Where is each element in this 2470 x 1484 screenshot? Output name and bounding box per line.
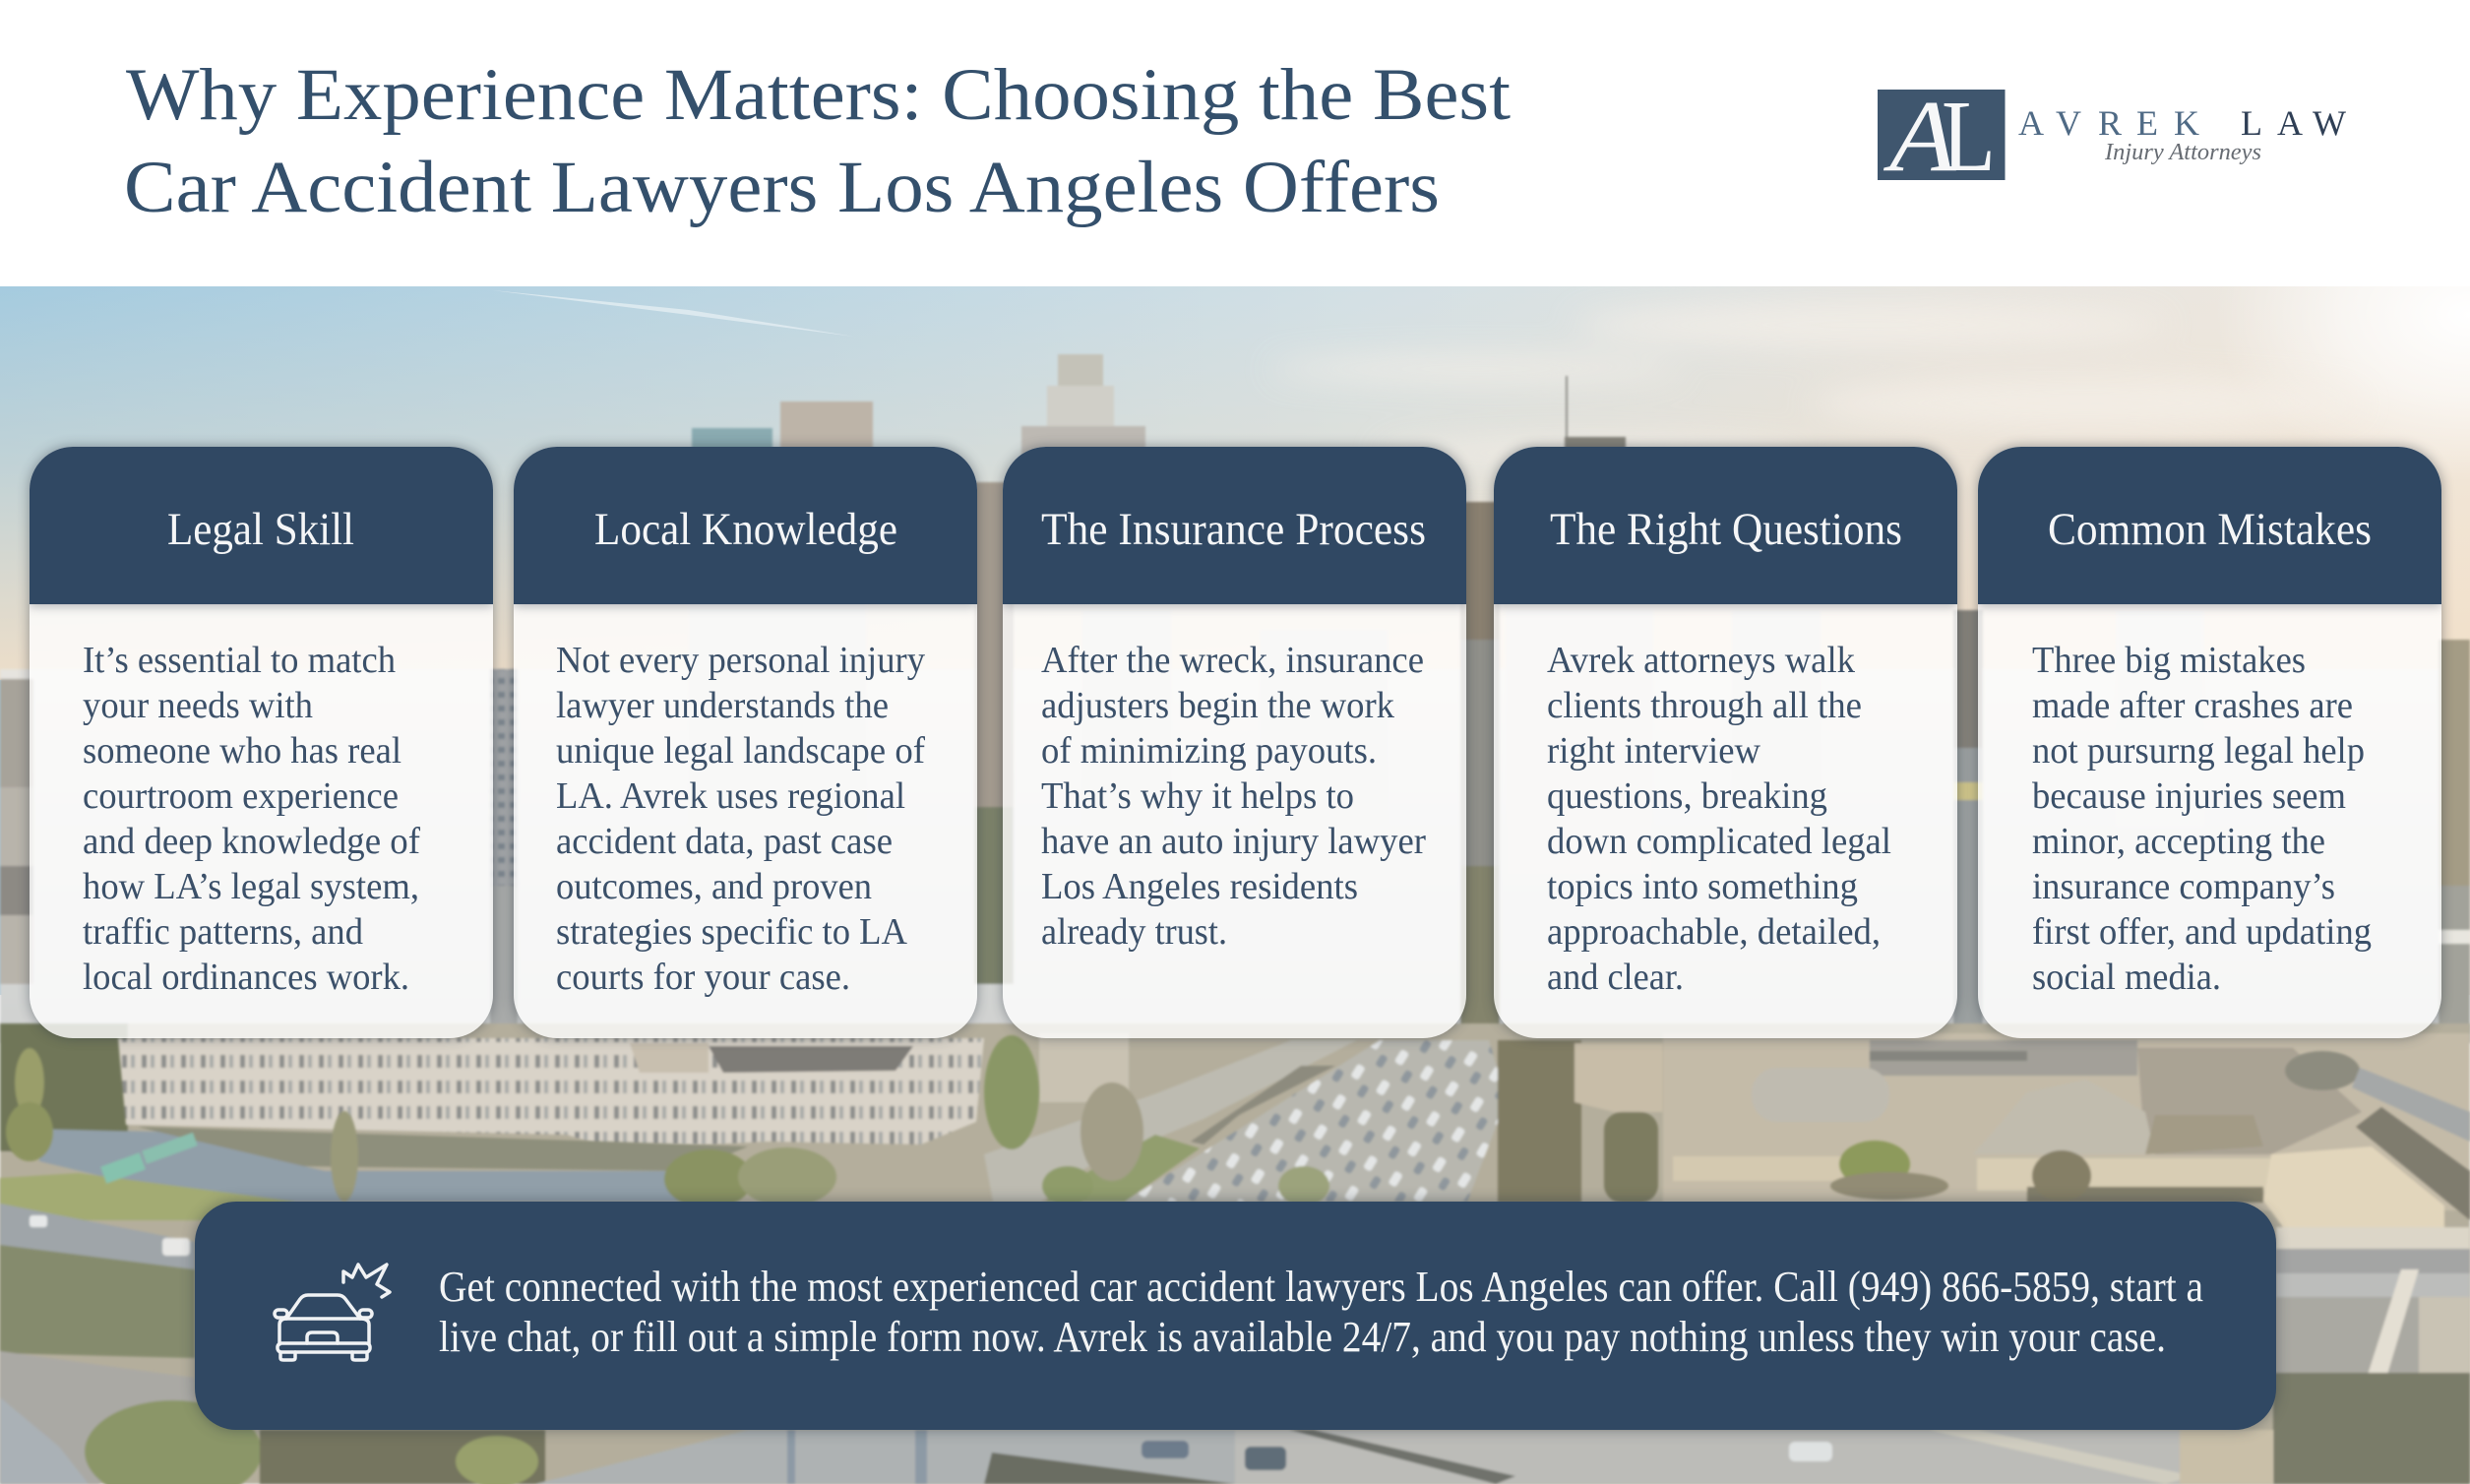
panel body text: The Insurance Process [1041,640,1426,953]
panel body text: The Right Questions: Avrek attorneys walk [1547,640,1855,681]
panel body text: The Right Questions: topics into something [1547,866,1858,907]
panel body text: The Insurance Process: Los Angeles residents [1041,866,1358,907]
panel body text: Legal Skill: how LA’s legal system, [83,866,419,907]
panel body text: Common Mistakes [2032,640,2372,998]
construction site [1673,1040,2470,1484]
panel body text: The Insurance Process: already trust. [1041,911,1227,953]
sky [0,148,2470,995]
logo wordmark: AVREK LAW [2018,103,2346,143]
panel body text: The Right Questions: approachable, detailed, [1547,911,1881,953]
panel body text: Common Mistakes: insurance company’s [2032,866,2335,907]
panel body text: Legal Skill: It’s essential to match [83,640,396,681]
panel header: Legal Skill [30,447,493,604]
panel body text: Legal Skill: traffic patterns, and [83,911,363,953]
panel body text: Local Knowledge: accident data, past case [556,821,893,862]
panel body text: The Right Questions: down complicated legal [1547,821,1891,862]
panel header: The Insurance Process [1003,447,1466,604]
panel: Local Knowledge [514,447,977,1038]
panel body text: Local Knowledge [556,640,925,998]
panel body text: The Insurance Process: adjusters begin the work [1041,685,1394,726]
panel body text: Common Mistakes: not pursurng legal help [2032,730,2365,772]
logo mark: AL monogram: L [1942,80,1996,192]
panel header: Local Knowledge: Local Knowledge [594,504,897,555]
panel: Legal Skill [30,447,493,1038]
panel body text: Local Knowledge: lawyer understands the [556,685,889,726]
panel header: Common Mistakes [1978,447,2441,604]
panel header: Common Mistakes: Common Mistakes [2048,504,2372,555]
panel body text: The Insurance Process: of minimizing payouts. [1041,730,1377,772]
panel header: The Insurance Process: The Insurance Process [1041,504,1426,555]
panel body text: Common Mistakes: made after crashes are [2032,685,2353,726]
panel body text: Common Mistakes: first offer, and updating [2032,911,2372,953]
central freeway [984,1040,1357,1202]
title [124,54,1511,228]
panel: The Insurance Process [1003,447,1466,1038]
panel body text: The Insurance Process: That’s why it helps to [1041,775,1354,817]
panel header: Local Knowledge [514,447,977,604]
panel body text: Legal Skill: your needs with [83,685,313,726]
panel body text: The Insurance Process: After the wreck, insurance [1041,640,1424,681]
downtown skyline [0,354,2470,1043]
apartment building [118,1038,984,1149]
panel body text: Common Mistakes: Three big mistakes [2032,640,2306,681]
panel: The Right Questions [1494,447,1957,1038]
panel body text: Local Knowledge: outcomes, and proven [556,866,872,907]
panel body text: Local Knowledge: LA. Avrek uses regional [556,775,905,817]
roads, hedges and trees [0,1035,2273,1484]
panel body text: Local Knowledge: strategies specific to LA [556,911,908,953]
panel body text: The Right Questions: right interview [1547,730,1761,772]
panel body text: Common Mistakes: social media. [2032,957,2221,998]
panel body text: Local Knowledge: unique legal landscape of [556,730,925,772]
logo: Avrek Law Injury Attorneys [1878,80,2346,192]
panel body text: The Right Questions [1547,640,1891,998]
panel body text: The Right Questions: questions, breaking [1547,775,1827,817]
panel body text: Legal Skill: courtroom experience [83,775,399,817]
panel body text: Legal Skill: local ordinances work. [83,957,409,998]
ground and city blocks [0,1023,2470,1484]
panel body text: Common Mistakes: because injuries seem [2032,775,2346,817]
panel body text: Local Knowledge: Not every personal injury [556,640,925,681]
panel header: The Right Questions [1494,447,1957,604]
panel header: The Right Questions: The Right Questions [1550,504,1902,555]
logo tagline: Injury Attorneys [2104,140,2261,165]
panel body text: Legal Skill [83,640,421,998]
title: Why Experience Matters: Choosing the Best [126,54,1511,136]
logo mark: AL monogram: A [1883,80,1957,192]
panel body text: Local Knowledge: courts for your case. [556,957,850,998]
panel body text: The Right Questions: and clear. [1547,957,1684,998]
panel header: Legal Skill: Legal Skill [167,504,354,555]
panel body text: Common Mistakes: minor, accepting the [2032,821,2325,862]
title: Car Accident Lawyers Los Angeles Offers [124,147,1440,228]
panel body text: Legal Skill: someone who has real [83,730,401,772]
panel body text: The Insurance Process: have an auto injury lawyer [1041,821,1426,862]
icon: crashed car with impact burst [275,1265,390,1360]
panel body text: The Right Questions: clients through all the [1547,685,1862,726]
callout: call to action banner [195,1202,2276,1430]
panel body text: Legal Skill: and deep knowledge of [83,821,420,862]
panel: Common Mistakes [1978,447,2441,1038]
call to action text [439,1263,2203,1361]
logo mark: AL monogram [1878,80,2006,193]
